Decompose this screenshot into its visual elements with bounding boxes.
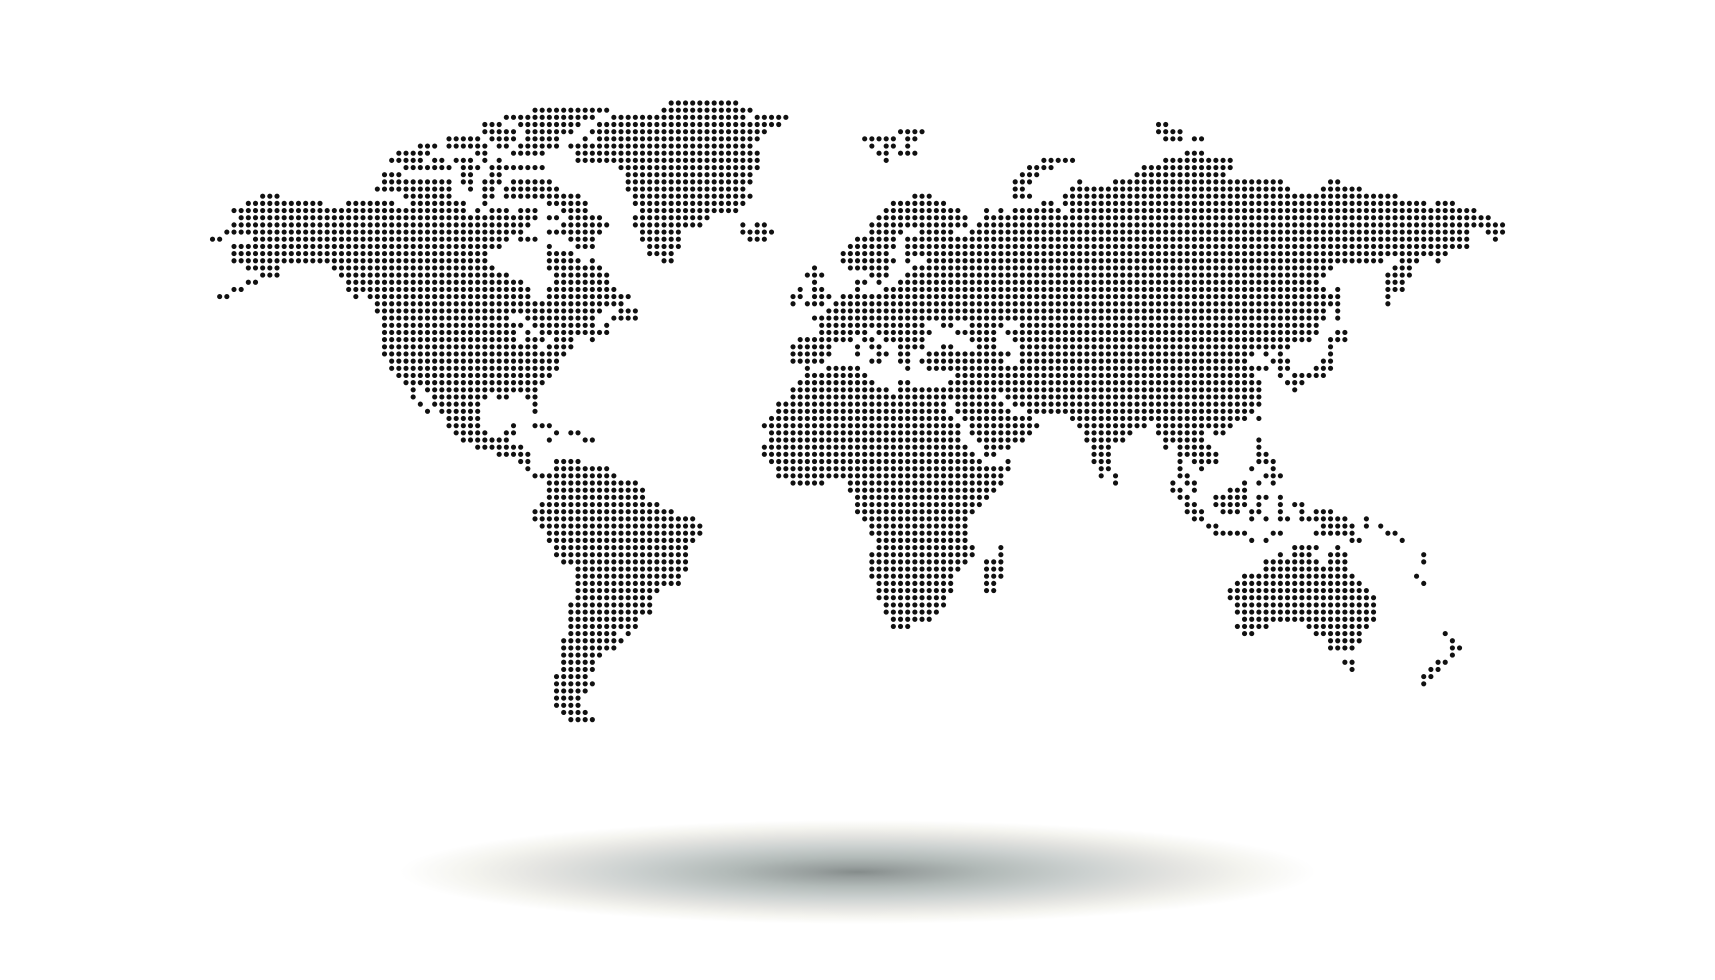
dotted world map	[212, 103, 1503, 720]
ground shadow	[400, 820, 1316, 924]
region: Europe, Asia and Africa	[743, 125, 1503, 626]
region: Greenland	[571, 103, 786, 261]
region: South America	[535, 462, 700, 720]
region: North America	[212, 110, 635, 469]
region: Oceania	[1230, 505, 1460, 684]
